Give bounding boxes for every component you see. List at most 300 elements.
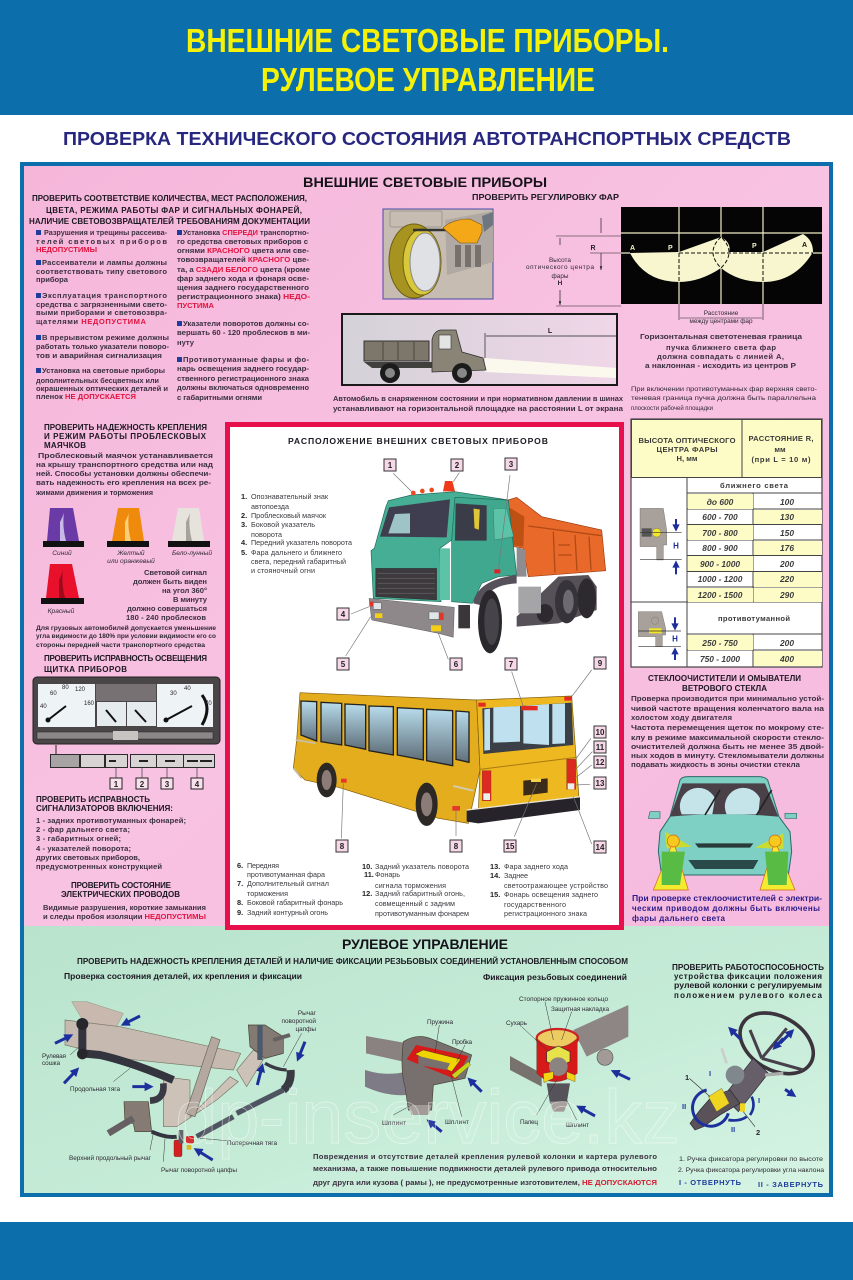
table rows: low beam: 130 xyxy=(780,512,794,522)
illustration: bus xyxy=(293,670,592,844)
legend: items 6-9: 7. xyxy=(237,879,243,888)
legend: items 13-15: 14. xyxy=(490,871,500,880)
text: wipers requirements: ных ходов в минуту. Стекломыватели должны xyxy=(631,751,824,760)
icon: blue beacon: Синий xyxy=(52,549,72,557)
legend: items 1-5: 1. xyxy=(241,492,247,501)
legend: items 10-12: противотуманным фонарем xyxy=(375,909,469,918)
illustration: instrument cluster: 40 xyxy=(40,704,47,710)
right column rules: Установка СПЕРЕДИ транспортно- xyxy=(183,228,309,237)
labels: linkage parts: поворотной xyxy=(282,1017,316,1025)
table rows: fog lights xyxy=(700,614,794,664)
illustration: instrument cluster xyxy=(33,677,220,744)
labels: steering column numbers xyxy=(682,1069,760,1137)
labels: steering column numbers: 2 xyxy=(756,1128,760,1137)
text: truck beacon note: угла видимости до 180% при условии видимости его со xyxy=(36,633,216,640)
labels: linkage parts: сошка xyxy=(42,1060,60,1067)
legend: items 10-12: 12. xyxy=(362,889,372,898)
heading: wiring: ПРОВЕРИТЬ СОСТОЯНИЕ xyxy=(71,881,172,890)
text: beacon visibility: на угол 360° xyxy=(162,586,207,595)
callout numbers 1-15: 12 xyxy=(596,758,605,767)
heading: wiring: ЭЛЕКТРИЧЕСКИХ ПРОВОДОВ xyxy=(61,890,180,899)
text: indicators list: 2 - фар дальнего света; xyxy=(36,825,130,834)
heading: column lock check xyxy=(672,963,824,1000)
callout numbers 1-15: 5 xyxy=(341,660,346,669)
illustration: instrument cluster: 70 xyxy=(205,701,212,707)
text: beacon mounting: на крышу транспортного средства или над xyxy=(36,460,213,469)
heading: column lock check: ПРОВЕРИТЬ РАБОТОСПОСОБНОСТЬ xyxy=(672,963,824,972)
icon: red beacon: Красный xyxy=(48,607,75,615)
heading: dashboard: ПРОВЕРИТЬ ИСПРАВНОСТЬ ОСВЕЩЕНИЯ xyxy=(44,654,207,663)
text: horizontal cut-off rule: должна совпадать с линией А, xyxy=(657,352,784,361)
diagram: dimension annotations xyxy=(526,218,763,325)
callout numbers 1-15: 10 xyxy=(596,728,605,737)
heading: wipers: СТЕКЛООЧИСТИТЕЛИ И ОМЫВАТЕЛИ xyxy=(648,674,801,683)
labels: linkage parts: Верхний продольный рычаг xyxy=(69,1154,152,1162)
text: indicators list: других световых приборов, xyxy=(36,853,140,862)
top banner xyxy=(0,0,853,115)
legend: items 1-5: Проблесковый маячок xyxy=(251,511,327,520)
diagram: headlight beam pattern screen: P xyxy=(668,245,673,252)
illustration: headlight being adjusted xyxy=(383,209,493,299)
right column rules: товозвращателей КРАСНОГО цве- xyxy=(177,255,309,264)
caption: truck position xyxy=(333,394,624,413)
heading: wipers xyxy=(648,674,801,693)
heading: compliance: ЦВЕТА, РЕЖИМА РАБОТЫ ФАР И СИГНАЛЬНЫХ ФОНАРЕЙ, xyxy=(46,206,302,215)
panel: dashboard lighting xyxy=(33,654,220,921)
diagram: headlight beam pattern screen: A xyxy=(802,242,807,249)
title: ВНЕШНИЕ СВЕТОВЫЕ ПРИБОРЫ. xyxy=(186,22,669,59)
caption: part state: Проверка состояния деталей, их крепления и фиксации xyxy=(64,972,302,981)
heading: indicators: ПРОВЕРИТЬ ИСПРАВНОСТЬ xyxy=(36,795,150,804)
labels: linkage parts: Рычаг xyxy=(298,1010,317,1017)
text: indicators list: 4 - указателей поворота; xyxy=(36,844,131,853)
text: wipers requirements: подавать жидкость в зоны очистки стекла xyxy=(631,760,801,769)
title: РУЛЕВОЕ УПРАВЛЕНИЕ xyxy=(261,61,595,98)
table header: мм xyxy=(774,445,786,454)
heading: beacons xyxy=(44,423,207,450)
heading: beacons: ПРОВЕРИТЬ НАДЕЖНОСТЬ КРЕПЛЕНИЯ xyxy=(44,423,207,432)
right column rules: го средства световых приборов с xyxy=(177,237,308,246)
icon: orange beacon: или оранжевый xyxy=(107,557,155,565)
legend: items 10-12: Задний указатель поворота xyxy=(375,862,469,871)
heading: locations: РАСПОЛОЖЕНИЕ ВНЕШНИХ СВЕТОВЫХ ПРИБОРОВ xyxy=(288,436,548,446)
left column rules: Эксплуатация транспортного xyxy=(42,291,167,300)
legend: items 1-5: 3. xyxy=(241,520,247,529)
diagram: dimension annotations: H xyxy=(558,280,563,287)
text: beacon visibility: должно совершаться xyxy=(127,604,207,613)
labels: threaded connections: Пробка xyxy=(452,1038,472,1046)
left column rules: Рассеиватели и лампы должны xyxy=(42,258,167,267)
table rows: low beam: 150 xyxy=(780,528,794,538)
table rows: low beam: 100 xyxy=(780,497,794,507)
table rows: low beam: 600 - 700 xyxy=(702,512,738,522)
illustration: instrument cluster: 120 xyxy=(75,687,86,693)
legend: column lock handles xyxy=(678,1156,824,1189)
icon: orange beacon: Желтый xyxy=(116,549,145,557)
labels: threaded connections: Стопорное пружинное кольцо xyxy=(519,996,608,1003)
right column rules: регистрационного знака) НЕДО- xyxy=(177,292,311,301)
callout numbers 1-15: 1 xyxy=(388,461,393,470)
legend: items 1-5: 5. xyxy=(241,548,247,557)
illustration: steering linkage xyxy=(55,1002,305,1162)
heading: beacons: И РЕЖИМ РАБОТЫ ПРОБЛЕСКОВЫХ xyxy=(44,432,207,441)
text: fog light note xyxy=(631,386,817,412)
legend: items 10-12: сигнала торможения xyxy=(375,881,446,890)
labels: linkage parts: цапфы xyxy=(295,1026,316,1033)
diagram: dimension annotations: фары xyxy=(552,273,569,280)
subheading: steering parts: ПРОВЕРИТЬ НАДЕЖНОСТЬ КРЕПЛЕНИЯ ДЕТАЛЕЙ И НАЛИЧИЕ ФИКСАЦИИ РЕЗЬБОВЫХ СОЕДИНЕНИЙ УСТАНОВЛЕННЫМ СПОСОБОМ xyxy=(77,957,628,966)
table rows: low beam: 700 - 800 xyxy=(702,528,738,538)
illustration: car front with wipers and light beams xyxy=(648,777,797,890)
legend: items 13-15: Фонарь освещения заднего xyxy=(504,890,598,899)
illustration: threaded connections xyxy=(365,1002,630,1132)
right column rules: щения заднего государственного xyxy=(177,283,309,292)
text: beacon visibility xyxy=(126,568,208,622)
numbered labels 1-4: 1 xyxy=(114,780,119,789)
diagram: dimension annotations: оптического центра xyxy=(526,264,594,271)
diagram: headlight beam pattern screen: A xyxy=(630,245,635,252)
legend: column lock handles: II - ЗАВЕРНУТЬ xyxy=(758,1180,824,1189)
labels: threaded connections: Сухарь xyxy=(506,1020,528,1027)
right column rules: с габаритными огнями xyxy=(177,393,262,402)
text: beacon mounting: вать надежность его крепления на всех ре- xyxy=(36,478,212,487)
legend: column lock handles: I - ОТВЕРНУТЬ xyxy=(679,1178,742,1187)
legend: items 10-12: 10. xyxy=(362,862,372,871)
legend: items 6-9: торможения xyxy=(247,889,288,898)
icon: truck front with H dimension, fog light xyxy=(638,612,681,660)
right column rules: нуту xyxy=(177,338,195,347)
labels: threaded connections: Защитная накладка xyxy=(551,1006,609,1013)
text: beacon visibility: В минуту xyxy=(173,595,208,604)
table rows: low beam: 200 xyxy=(779,559,794,569)
icon: orange beacon xyxy=(107,508,155,565)
heading: dashboard xyxy=(44,654,207,674)
legend: items 6-9: Дополнительный сигнал xyxy=(247,879,329,888)
heading: steering: РУЛЕВОЕ УПРАВЛЕНИЕ xyxy=(342,936,508,952)
legend: items 13-15: Фара заднего хода xyxy=(504,862,568,871)
heading: column lock check: устройства фиксации положения xyxy=(674,972,822,981)
legend: items 1-5: Боковой указатель xyxy=(251,520,315,529)
heading: column lock check: рулевой колонки с регулируемым xyxy=(674,981,822,990)
table rows: low beam: 220 xyxy=(779,574,794,584)
text: wipers requirements: чивой частоте вращения коленчатого вала на xyxy=(631,704,825,713)
left column rules: прибора xyxy=(36,275,69,284)
text: beacon visibility: 180 - 240 проблесков xyxy=(126,613,206,622)
callout numbers 1-15: 11 xyxy=(596,743,605,752)
legend: items 13-15: государственного xyxy=(504,900,566,909)
icon: truck front with H dimension, low beam xyxy=(640,508,682,574)
subtitle: ПРОВЕРКА ТЕХНИЧЕСКОГО СОСТОЯНИЯ АВТОТРАНСПОРТНЫХ СРЕДСТВ xyxy=(63,129,791,149)
legend: items 13-15 xyxy=(490,862,608,918)
heading: beacons: МАЯЧКОВ xyxy=(44,441,86,450)
legend: items 1-5: 2. xyxy=(241,511,247,520)
text: damage warning: Повреждения и отсутствие деталей крепления рулевой колонки и картера рулевого xyxy=(313,1152,657,1161)
labels: linkage parts: Поперечная тяга xyxy=(227,1140,277,1147)
text: indicators list: предусмотренных конструкцией xyxy=(36,862,162,871)
left column rules: соответствовать типу светового xyxy=(36,267,167,276)
left column rules: Разрушения и трещины рассеива- xyxy=(44,228,167,237)
text: wipers requirements: очистителей должна быть не менее 35 двой- xyxy=(631,742,825,751)
legend: items 10-12: совмещенный с задним xyxy=(375,899,455,908)
numbered labels 1-4 xyxy=(110,768,203,789)
legend: items 6-9: 8. xyxy=(237,898,243,907)
illustration: truck in front of screen: L xyxy=(548,328,553,335)
labels: linkage parts: Рычаг поворотной цапфы xyxy=(161,1166,237,1174)
legend: items 6-9: 9. xyxy=(237,908,243,917)
right column rules: Указатели поворотов должны со- xyxy=(183,319,309,328)
diagram: headlight beam pattern screen: P xyxy=(752,243,757,250)
table header xyxy=(638,434,814,464)
text: damage warning: друг друга или кузова ( рамы ), не предусмотренные изготовителем, НЕ ДОПУСКАЮТСЯ xyxy=(313,1178,657,1187)
table header: ВЫСОТА ОПТИЧЕСКОГО xyxy=(638,436,736,445)
text: horizontal cut-off rule: пучка ближнего света фар xyxy=(666,343,776,352)
legend: items 6-9 xyxy=(237,861,343,917)
illustration: instrument cluster: 30 xyxy=(170,691,177,697)
callout numbers 1-15: 13 xyxy=(596,779,605,788)
numbered labels 1-4: 4 xyxy=(195,780,200,789)
text: horizontal cut-off rule: а наклонная - исходить из центров Р xyxy=(645,361,796,370)
text: beacon mounting xyxy=(35,451,213,497)
callout numbers 1-15: 8 xyxy=(454,842,459,851)
left column rules: НЕДОПУСТИМЫ xyxy=(36,245,97,254)
heading: column lock check: положением рулевого колеса xyxy=(674,991,823,1000)
right column rules: нарь освещения заднего государ- xyxy=(177,364,309,373)
diagram: dimension annotations: R xyxy=(590,245,596,252)
legend: items 10-12: Фонарь xyxy=(375,870,400,879)
heading: dashboard: ЩИТКА ПРИБОРОВ xyxy=(44,665,127,674)
callout numbers 1-15: 2 xyxy=(455,461,460,470)
heading: compliance xyxy=(29,194,310,226)
illustration: adjustable steering column xyxy=(689,1001,824,1130)
callout numbers 1-15: 6 xyxy=(454,660,459,669)
legend: items 10-12: Задний габаритный огонь, xyxy=(375,889,465,898)
icon: white beacon: Бело-лунный xyxy=(172,549,212,557)
panel: steering xyxy=(42,936,824,1189)
legend: items 1-5: Опознавательный знак xyxy=(251,492,329,501)
legend: items 13-15: 15. xyxy=(490,890,500,899)
left column rules xyxy=(36,228,169,401)
text: beacon visibility: должен быть виден xyxy=(133,577,207,586)
callout numbers 1-15: 4 xyxy=(341,610,346,619)
text: fog light note: теневая граница пучка должна быть параллельна xyxy=(631,394,817,402)
labels: threaded connections: Шплинт xyxy=(382,1120,406,1127)
legend: items 1-5: поворота xyxy=(251,530,282,539)
icon: blue beacon xyxy=(43,508,84,557)
text: truck beacon note: Для грузовых автомобилей допускается уменьшение xyxy=(36,624,216,632)
text: horizontal cut-off rule xyxy=(640,332,803,370)
panel: external lights header: ВНЕШНИЕ СВЕТОВЫЕ ПРИБОРЫ xyxy=(303,175,547,190)
text: beacon mounting: ней. Способы установки должны обеспечи- xyxy=(36,469,211,478)
labels: threaded connections xyxy=(382,996,609,1129)
illustration: instrument cluster: 160 xyxy=(84,701,95,707)
text: wipers requirements: клу в режиме максимальной скорости стекло- xyxy=(631,733,825,742)
callout numbers 1-15: 3 xyxy=(509,460,514,469)
icon: truck front with H dimension, fog light: H xyxy=(672,635,678,644)
labels: threaded connections: Шплинт xyxy=(566,1122,589,1129)
text: indicators list: 1 - задних противотуманных фонарей; xyxy=(36,816,186,825)
table header: H, мм xyxy=(677,454,698,463)
diagram: dimension annotations: Высота xyxy=(549,257,571,264)
labels: threaded connections: Палец xyxy=(520,1119,538,1126)
illustration: truck in front of screen xyxy=(342,314,617,385)
callout numbers 1-15 xyxy=(336,458,606,853)
numbered labels 1-4: 2 xyxy=(140,780,145,789)
legend: items 1-5: автопоезда xyxy=(251,502,289,511)
left column rules: щателями НЕДОПУСТИМА xyxy=(36,317,147,326)
legend: items 6-9: противотуманная фара xyxy=(247,870,325,879)
text: beacon visibility: Световой сигнал xyxy=(144,568,207,577)
right column rules: фар заднего хода и фонаря осве- xyxy=(177,274,309,283)
legend: items 10-12: 11. xyxy=(364,870,374,879)
left column rules: телей световых приборов xyxy=(36,237,167,246)
text: indicators list xyxy=(36,816,186,871)
numbered labels 1-4: 3 xyxy=(165,780,170,789)
text: wipers requirements: холостом ходу двигателя xyxy=(631,713,732,722)
text: truck beacon note: стороны передней части транспортного средства xyxy=(36,641,205,649)
heading: indicators xyxy=(36,795,173,813)
labels: linkage parts: Рулевая xyxy=(42,1053,67,1060)
legend: items 1-5: Фара дальнего и ближнего xyxy=(251,548,342,557)
legend: items 6-9: 6. xyxy=(237,861,243,870)
caption: truck position: устанавливают на горизонтальной площадке на расстоянии L от экрана xyxy=(333,404,624,413)
text: damage warning xyxy=(313,1152,657,1187)
heading: indicators: СИГНАЛИЗАТОРОВ ВКЛЮЧЕНИЯ: xyxy=(36,804,173,813)
legend: items 1-5: и стояночный огни xyxy=(251,566,315,575)
text: indicators list: 3 - габаритных огней; xyxy=(36,834,121,843)
heading: wipers: ВЕТРОВОГО СТЕКЛА xyxy=(682,684,767,693)
left column rules: В прерывистом режиме должны xyxy=(42,333,169,342)
text: truck beacon note xyxy=(36,624,216,649)
left column rules: пленок НЕ ДОПУСКАЕТСЯ xyxy=(36,392,136,401)
right column rules: огнями КРАСНОГО цвета или све- xyxy=(177,246,309,255)
legend: items 1-5: Передний указатель поворота xyxy=(251,538,352,547)
legend: items 13-15: светоотражающее устройство xyxy=(504,881,608,890)
text: wiring xyxy=(43,903,206,921)
right column rules xyxy=(177,228,311,402)
text: beacon mounting: жимами движения и торможения xyxy=(35,488,153,497)
text: wipers requirements: Проверка производится при минимально устой- xyxy=(631,694,824,703)
table rows: low beam: до 600 xyxy=(707,497,734,507)
text: wiring: Видимые разрушения, короткие замыкания xyxy=(43,903,206,912)
labels: threaded connections: Шплинт xyxy=(445,1119,469,1126)
table rows: low beam: 1000 - 1200 xyxy=(698,574,743,584)
text: horizontal cut-off rule: Горизонтальная светотеневая граница xyxy=(640,332,803,341)
text: wipers requirements: Частота перемещения щеток по мокрому сте- xyxy=(631,723,825,732)
table rows: low beam: 1200 - 1500 xyxy=(698,590,743,600)
table rows: fog lights: 200 xyxy=(779,638,794,648)
text: wipers requirements xyxy=(631,694,825,769)
legend: items 10-12 xyxy=(362,862,469,918)
labels: steering column numbers: I xyxy=(758,1096,760,1105)
caption: truck position: Автомобиль в снаряженном состоянии и при нормативном давлении в шинах xyxy=(333,394,623,403)
table rows: low beam: 290 xyxy=(779,590,794,600)
labels: threaded connections: Пружина xyxy=(427,1019,453,1026)
panel: light locations xyxy=(228,424,622,928)
labels: linkage parts: Продольная тяга xyxy=(70,1086,120,1093)
diagram: dimension annotations: между центрами фар xyxy=(690,318,753,325)
text: damage warning: механизма, а также повышение подвижности деталей рулевого привода относительно xyxy=(313,1164,657,1173)
left column rules: тов и аварийная сигнализация xyxy=(36,351,162,360)
illustration: dump truck xyxy=(346,473,606,659)
note: wipers and high beam xyxy=(632,894,822,923)
callout numbers 1-15: 14 xyxy=(596,843,605,852)
panel: compliance checks text xyxy=(29,194,311,402)
icon: red beacon xyxy=(41,564,84,615)
legend: column lock handles: 1. Ручка фиксатора регулировки по высоте xyxy=(679,1156,824,1163)
note: wipers and high beam: ческим приводом должны быть включены xyxy=(632,904,820,913)
labels: steering column numbers: II xyxy=(682,1102,686,1111)
illustration: instrument cluster: 40 xyxy=(184,686,191,692)
labels: steering column numbers: I xyxy=(709,1069,711,1078)
table rows: low beam: 900 - 1000 xyxy=(700,559,740,569)
labels: linkage parts xyxy=(42,1010,317,1174)
table rows: low beam: ближнего света xyxy=(720,481,789,490)
left column rules: работать только указатели поворо- xyxy=(36,342,169,351)
legend: items 13-15: Заднее xyxy=(504,871,528,880)
callout numbers 1-15: 8 xyxy=(340,842,345,851)
text: fog light note: плоскости рабочей площадки xyxy=(631,404,713,412)
legend: column lock handles: 2. Ручка фиксатора регулировки угла наклона xyxy=(678,1167,824,1174)
bottom banner xyxy=(0,1222,853,1280)
legend: items 13-15: регистрационного знака xyxy=(504,909,587,918)
note: wipers and high beam: При проверке стеклоочистителей с электри- xyxy=(632,894,822,903)
right column rules: ПУСТИМА xyxy=(177,301,215,310)
right column rules: должны включаться одновременно xyxy=(177,383,309,392)
labels: steering column numbers: II xyxy=(731,1125,735,1134)
note: wipers and high beam: фары дальнего света xyxy=(632,914,726,923)
table header: ЦЕНТРА ФАРЫ xyxy=(656,445,718,454)
text: fog light note: При включении противотуманных фар верхняя свето- xyxy=(631,386,817,393)
legend: items 13-15: 13. xyxy=(490,862,500,871)
callout numbers 1-15: 7 xyxy=(509,660,514,669)
main frame xyxy=(20,162,833,1197)
table rows: fog lights: противотуманной xyxy=(718,614,790,623)
title xyxy=(186,22,669,98)
icon: truck front with H dimension, low beam: H xyxy=(673,541,679,550)
left column rules: Установка на световые приборы xyxy=(42,366,165,375)
panel: beacons xyxy=(35,423,216,649)
icon row: warning indicators xyxy=(50,745,215,768)
callout numbers 1-15: 9 xyxy=(598,659,603,668)
table rows: low beam: 800 - 900 xyxy=(702,543,738,553)
illustration: instrument cluster: 60 xyxy=(50,691,57,697)
left column rules: выми приборами и световозвра- xyxy=(36,308,167,317)
labels: steering column numbers: 1 xyxy=(685,1073,689,1082)
illustration: instrument cluster: 80 xyxy=(62,685,69,691)
legend: items 6-9: Задний контурный огонь xyxy=(247,908,328,917)
heading: compliance: ПРОВЕРИТЬ СООТВЕТСТВИЕ КОЛИЧЕСТВА, МЕСТ РАСПОЛОЖЕНИЯ, xyxy=(32,194,307,203)
legend: items 6-9: Передняя xyxy=(247,861,279,870)
caption: threaded connection: Фиксация резьбовых соединений xyxy=(483,973,627,982)
table header: РАССТОЯНИЕ R, xyxy=(748,434,814,443)
right column rules: Противотуманные фары и фо- xyxy=(183,355,309,364)
right column rules: та, а СЗАДИ БЕЛОГО цвета (кроме xyxy=(177,265,310,274)
table rows: fog lights: 250 - 750 xyxy=(701,638,738,648)
table: headlight height and distance R xyxy=(631,419,822,667)
heading: headlight adjustment: ПРОВЕРИТЬ РЕГУЛИРОВКУ ФАР xyxy=(472,192,619,202)
text: beacon mounting: Проблесковый маячок устанавливается xyxy=(38,451,213,460)
table rows: low beam xyxy=(698,481,794,600)
diagram: headlight beam pattern screen xyxy=(621,207,822,304)
text: wiring: и следы пробоя изоляции НЕДОПУСТИМЫ xyxy=(43,912,206,921)
legend: items 6-9: Боковой габаритный фонарь xyxy=(247,898,343,907)
right column rules: вершать 60 - 120 проблесков в ми- xyxy=(177,328,310,337)
left column rules: средства с загрязненными свето- xyxy=(36,300,167,309)
left column rules: дополнительных бесцветных или xyxy=(36,376,159,385)
heading: wiring xyxy=(61,881,180,899)
legend: items 1-5 xyxy=(241,492,352,575)
left column rules: окрашенных оптических деталей и xyxy=(36,384,168,393)
